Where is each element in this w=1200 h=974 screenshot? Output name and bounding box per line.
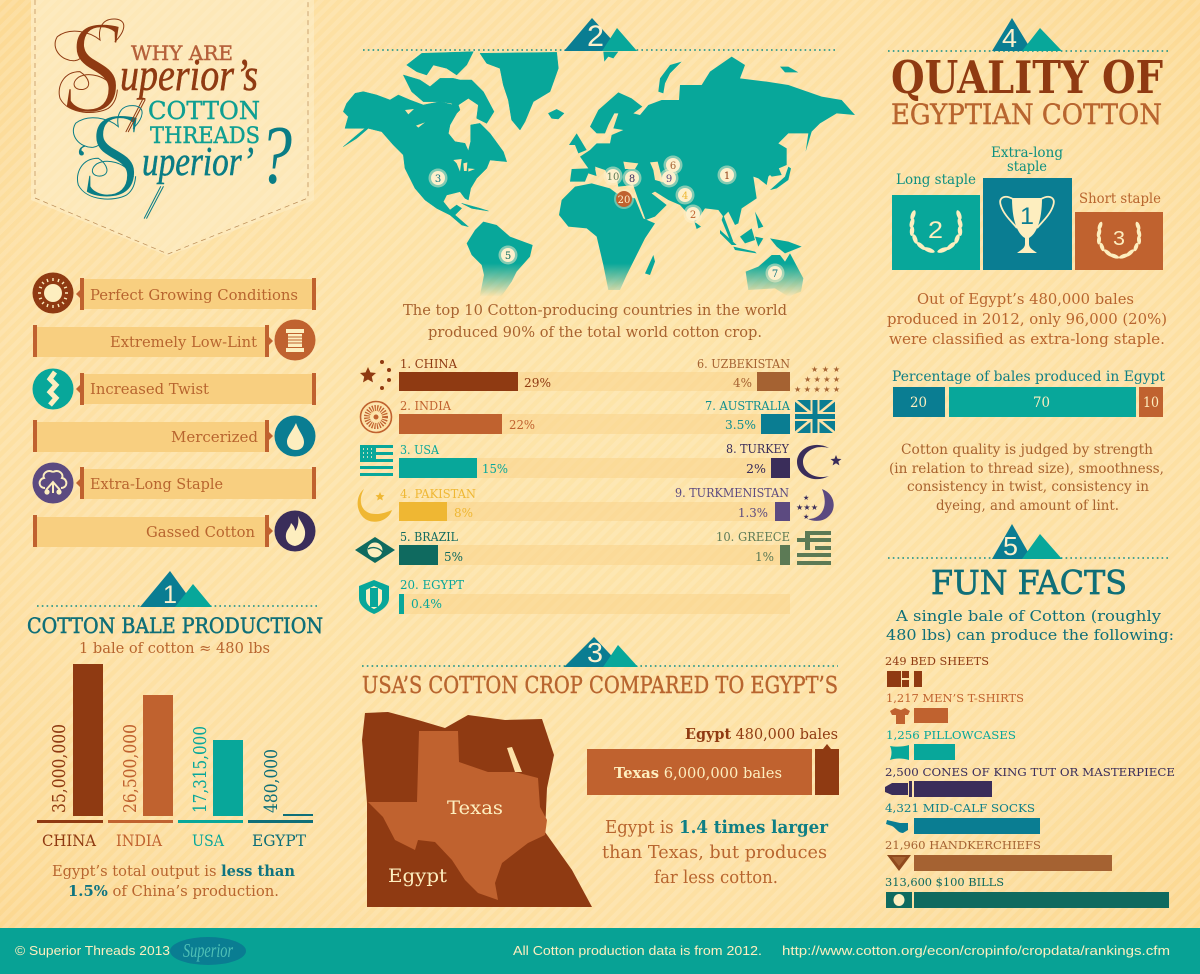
source url: http://www.cotton.org/econ/cropinfo/cropdata/rankings.cfm bbox=[782, 943, 1170, 958]
turkmenistan row: ★ bbox=[803, 494, 809, 502]
title: why are superior's cotton threads superior: THREADS bbox=[150, 124, 260, 149]
heading: EGYPTIAN COTTON bbox=[891, 98, 1162, 131]
uzbekistan row: ★★★★ bbox=[804, 375, 840, 384]
india row bbox=[360, 398, 535, 434]
logo: Superior bbox=[183, 940, 233, 962]
list item: extremely low-lint: Extremely Low-Lint bbox=[110, 333, 257, 351]
percentage bar bbox=[892, 369, 1166, 417]
turkmenistan row: 9. TURKMENISTAN bbox=[675, 485, 789, 500]
greece row: 1% bbox=[755, 549, 774, 564]
quality paragraph: dyeing, and amount of lint. bbox=[936, 498, 1119, 514]
logo bbox=[170, 937, 246, 965]
turkmenistan row bbox=[675, 485, 834, 521]
title: why are superior's cotton threads superior bbox=[55, 0, 292, 224]
map caption: produced 90% of the total world cotton crop. bbox=[428, 323, 762, 341]
china row: 29% bbox=[524, 375, 551, 390]
footer: © Superior Threads 2013 bbox=[15, 943, 170, 958]
map markers: 2 bbox=[690, 210, 696, 221]
map markers bbox=[428, 156, 784, 282]
map caption: The top 10 Cotton-producing countries in the world bbox=[403, 301, 787, 319]
map: egypt and texas: Egypt bbox=[388, 865, 447, 887]
china row: 1. CHINA bbox=[400, 356, 458, 371]
egypt row: 20. EGYPT bbox=[400, 577, 465, 592]
fact: t-shirts: 1,217 MEN’S T-SHIRTS bbox=[886, 691, 1024, 705]
panel: section 5 fun facts bbox=[885, 524, 1175, 908]
panel: title pocket bbox=[31, 0, 314, 256]
turkmenistan row: ★★★ bbox=[796, 503, 818, 512]
australia row bbox=[705, 398, 835, 434]
section badge 5: 5 bbox=[1003, 531, 1018, 561]
title: why are superior's cotton threads superior: COTTON bbox=[148, 97, 260, 125]
map markers: 4 bbox=[682, 191, 688, 202]
uzbekistan row: 4% bbox=[733, 375, 752, 390]
fact: handkerchiefs bbox=[885, 838, 1112, 871]
comparison text: Egypt is 1.4 times larger bbox=[605, 817, 828, 838]
fact: socks: 4,321 MID-CALF SOCKS bbox=[885, 801, 1035, 815]
map: egypt and texas bbox=[362, 712, 592, 907]
comparison text bbox=[602, 817, 828, 888]
trophy bbox=[1000, 197, 1054, 253]
map caption bbox=[403, 301, 787, 341]
usa row bbox=[360, 442, 508, 478]
section badge 1 bbox=[140, 571, 212, 609]
map markers: 7 bbox=[772, 269, 778, 280]
caption: 1.5% of China’s production. bbox=[68, 883, 279, 900]
quality paragraph: Cotton quality is judged by strength bbox=[901, 442, 1153, 458]
map markers: 20 bbox=[618, 195, 630, 206]
list item: gassed cotton: Gassed Cotton bbox=[146, 523, 255, 541]
section badge 4: 4 bbox=[1002, 23, 1017, 53]
map markers: 9 bbox=[666, 174, 672, 185]
greece row: 10. GREECE bbox=[716, 529, 790, 544]
uzbekistan row: ★★★ bbox=[811, 365, 840, 374]
list item: extra-long staple: Extra-Long Staple bbox=[90, 475, 223, 493]
heading: USA’S COTTON CROP COMPARED TO EGYPT’S bbox=[362, 673, 838, 699]
laurel 2: 2 bbox=[928, 217, 943, 244]
list item: perfect growing conditions bbox=[32, 272, 316, 314]
title: why are superior's cotton threads superior: WHY ARE bbox=[131, 41, 233, 65]
map markers: 1 bbox=[724, 171, 730, 182]
laurel 2 bbox=[909, 210, 963, 254]
india row: 22% bbox=[509, 417, 535, 432]
fact: bed sheets: 249 BED SHEETS bbox=[885, 654, 989, 668]
section badge 2: 2 bbox=[587, 20, 604, 53]
uzbekistan row: ★★★★★ bbox=[794, 385, 840, 394]
section badge 5 bbox=[992, 524, 1062, 561]
comparison text: far less cotton. bbox=[654, 867, 778, 888]
list item: extra-long staple bbox=[32, 462, 316, 504]
section badge 3: 3 bbox=[587, 637, 603, 668]
comparison bar bbox=[587, 725, 839, 795]
staple paragraph: produced in 2012, only 96,000 (20%) bbox=[887, 312, 1167, 328]
uzbekistan row bbox=[697, 356, 840, 394]
fact: cones: 2,500 CONES OF KING TUT OR MASTERPIECE bbox=[885, 765, 1175, 779]
title: why are superior's cotton threads superior: uperior’s bbox=[120, 50, 258, 100]
world map bbox=[343, 52, 855, 298]
bar chart: 35,000,000 bbox=[50, 724, 70, 813]
fact: pillowcases: 1,256 PILLOWCASES bbox=[886, 728, 1016, 742]
staple podium: Extra-long bbox=[991, 145, 1063, 161]
fact: socks bbox=[885, 801, 1040, 834]
section badge 4 bbox=[992, 18, 1062, 53]
heading bbox=[891, 51, 1163, 131]
fact: pillowcases bbox=[886, 728, 1016, 760]
laurel 3 bbox=[1096, 221, 1142, 260]
map markers: 6 bbox=[670, 161, 676, 172]
turkmenistan row: 1.3% bbox=[738, 505, 768, 520]
bar chart: USA bbox=[192, 831, 224, 850]
fact: t-shirts bbox=[886, 691, 1024, 724]
section badge 3 bbox=[564, 637, 638, 668]
staple paragraph: Out of Egypt’s 480,000 bales bbox=[917, 292, 1134, 308]
fact: bed sheets bbox=[885, 654, 989, 687]
australia row: 7. AUSTRALIA bbox=[705, 398, 791, 413]
panel: section 1 cotton bale production bbox=[27, 571, 323, 900]
laurel 3: 3 bbox=[1113, 228, 1125, 250]
list item: mercerized bbox=[33, 416, 316, 456]
egypt row: 0.4% bbox=[411, 596, 442, 611]
title: why are superior's cotton threads superior: uperior’ bbox=[142, 138, 254, 184]
title: why are superior's cotton threads superior: S bbox=[84, 87, 140, 224]
brazil row: 5. BRAZIL bbox=[400, 529, 458, 544]
fact: handkerchiefs: 21,960 HANDKERCHIEFS bbox=[885, 838, 1041, 852]
panel: section 3 crop comparison bbox=[362, 637, 839, 907]
pakistan row: 4. PAKISTAN bbox=[400, 486, 476, 501]
brazil row bbox=[355, 529, 463, 565]
title: why are superior's cotton threads superior: ? bbox=[259, 109, 292, 202]
percentage bar: 20 bbox=[910, 395, 927, 411]
data source note: All Cotton production data is from 2012. bbox=[513, 943, 762, 958]
panel: cotton qualities list bbox=[32, 272, 316, 552]
map markers: 5 bbox=[505, 251, 511, 262]
usa row: 3. USA bbox=[400, 442, 440, 457]
intro text: A single bale of Cotton (roughly bbox=[895, 609, 1162, 625]
panel: section 2 world map bbox=[343, 18, 855, 341]
caption bbox=[52, 863, 295, 900]
list item: mercerized: Mercerized bbox=[171, 428, 258, 446]
list item: perfect growing conditions: Perfect Growing Conditions bbox=[90, 286, 298, 304]
bar chart: 26,500,000 bbox=[121, 724, 141, 813]
turkey row: 2% bbox=[746, 461, 766, 476]
map markers: 8 bbox=[629, 174, 635, 185]
india row: 2. INDIA bbox=[400, 398, 452, 413]
uzbekistan row: 6. UZBEKISTAN bbox=[697, 356, 790, 371]
list item: increased twist bbox=[32, 368, 316, 410]
pakistan row bbox=[358, 486, 476, 522]
map markers: 3 bbox=[435, 174, 441, 185]
quality paragraph: (in relation to thread size), smoothness, bbox=[889, 461, 1164, 477]
bar chart: EGYPT bbox=[252, 831, 306, 850]
tracks bbox=[399, 372, 790, 614]
heading: QUALITY OF bbox=[891, 51, 1163, 104]
bar chart bbox=[37, 664, 313, 850]
fact: bills bbox=[885, 875, 1169, 908]
staple podium: Long staple bbox=[896, 172, 976, 188]
caption: Egypt’s total output is less than bbox=[52, 863, 295, 880]
panel: country bar chart bbox=[355, 356, 842, 614]
greece row bbox=[716, 529, 831, 565]
bar chart: 17,315,000 bbox=[191, 726, 211, 813]
title: why are superior's cotton threads superior: ‘ bbox=[73, 136, 86, 181]
brazil row: 5% bbox=[444, 549, 463, 564]
percentage bar: 70 bbox=[1033, 395, 1050, 411]
fact: bills: 313,600 $100 BILLS bbox=[885, 875, 1004, 889]
percentage bar: 10 bbox=[1143, 395, 1159, 411]
section badge 1: 1 bbox=[163, 581, 177, 609]
staple podium bbox=[892, 145, 1163, 270]
heading: FUN FACTS bbox=[931, 563, 1127, 602]
comparison bar: Egypt 480,000 bales bbox=[685, 725, 838, 743]
map: egypt and texas: Texas bbox=[447, 797, 503, 819]
egypt row bbox=[359, 577, 465, 614]
staple paragraph bbox=[887, 292, 1167, 348]
percentage bar: Percentage of bales produced in Egypt bbox=[892, 369, 1166, 385]
quality paragraph bbox=[889, 442, 1164, 514]
comparison bar: Texas 6,000,000 bales bbox=[614, 764, 782, 782]
turkey row: 8. TURKEY bbox=[726, 441, 790, 456]
list item: gassed cotton bbox=[33, 510, 316, 552]
turkmenistan row: ★ bbox=[803, 513, 809, 521]
panel: section 4 quality bbox=[887, 18, 1168, 514]
staple podium: Short staple bbox=[1079, 191, 1161, 207]
subheading: 1 bale of cotton ≈ 480 lbs bbox=[79, 641, 270, 657]
intro text bbox=[886, 609, 1174, 644]
comparison text: than Texas, but produces bbox=[602, 842, 827, 863]
bar chart: CHINA bbox=[42, 831, 96, 850]
map markers: 10 bbox=[607, 172, 619, 183]
quality paragraph: consistency in twist, consistency in bbox=[907, 479, 1149, 495]
usa row: 15% bbox=[482, 461, 508, 476]
trophy: 1 bbox=[1020, 203, 1034, 230]
australia row: 3.5% bbox=[725, 417, 756, 432]
pakistan row: 8% bbox=[454, 505, 473, 520]
staple paragraph: were classified as extra-long staple. bbox=[889, 332, 1165, 348]
staple podium: staple bbox=[1007, 159, 1047, 175]
fact: cones bbox=[885, 765, 1175, 797]
list item: extremely low-lint bbox=[33, 320, 316, 360]
china row bbox=[360, 356, 551, 391]
section badge 2 bbox=[564, 18, 637, 53]
footer bbox=[0, 928, 1200, 974]
intro text: 480 lbs) can produce the following: bbox=[886, 628, 1174, 644]
heading: COTTON BALE PRODUCTION bbox=[27, 614, 323, 638]
list item: increased twist: Increased Twist bbox=[90, 380, 209, 398]
turkey row bbox=[726, 441, 842, 479]
bar chart: 480,000 bbox=[262, 749, 282, 813]
bar chart: INDIA bbox=[116, 831, 162, 850]
